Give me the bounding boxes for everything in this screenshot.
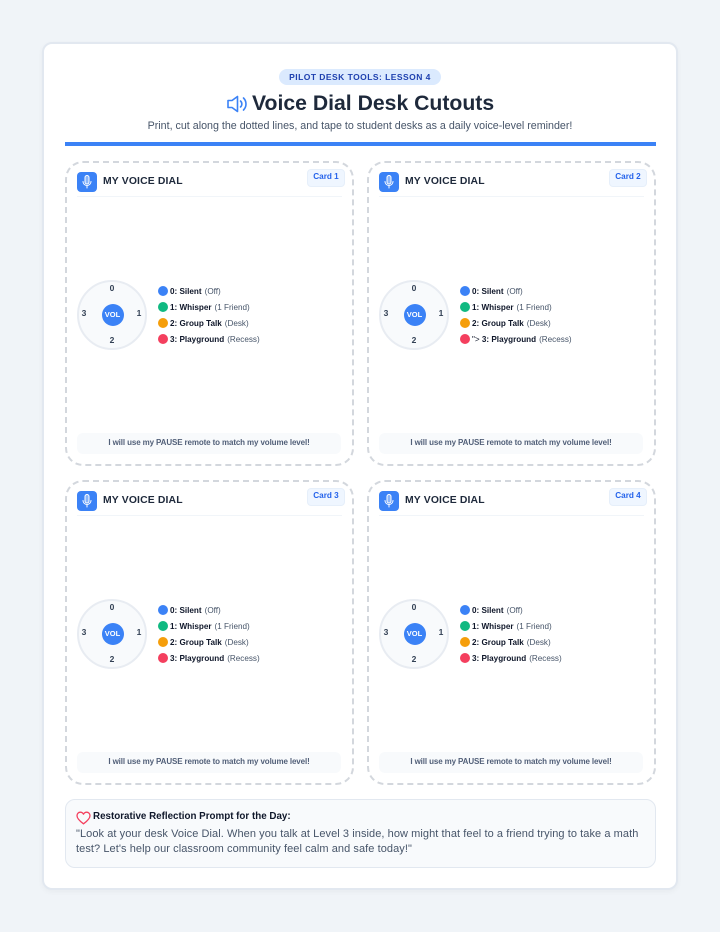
card footer: I will use my PAUSE remote to match my volume level! <box>410 756 612 766</box>
legend: 1: Whisper (1 Friend) <box>472 303 552 312</box>
card tag: Card 3 <box>313 490 339 500</box>
dial: 0 <box>110 283 114 293</box>
legend: "> 3: Playground (Recess) <box>472 335 572 344</box>
icon: speaker <box>227 96 247 112</box>
dial: 3 <box>82 627 86 637</box>
dial: 0 <box>412 602 416 612</box>
legend: 0: Silent (Off) <box>170 287 221 296</box>
prompt body <box>76 828 638 855</box>
icon: microphone <box>379 491 399 511</box>
card footer: I will use my PAUSE remote to match my volume level! <box>108 756 310 766</box>
header badge: PILOT DESK TOOLS: LESSON 4 <box>289 72 431 82</box>
panel: card 2 <box>367 161 656 466</box>
dial: 1 <box>137 627 141 637</box>
card footer: I will use my PAUSE remote to match my volume level! <box>410 438 612 446</box>
legend: 3: Playground (Recess) <box>170 654 260 663</box>
card tag <box>307 488 345 506</box>
dial <box>77 599 147 669</box>
dial: 2 <box>412 335 416 345</box>
legend: 1: Whisper (1 Friend) <box>170 303 250 312</box>
legend: 2: Group Talk (Desk) <box>170 638 249 647</box>
card heading: MY VOICE DIAL <box>405 495 485 506</box>
legend <box>460 605 562 663</box>
legend <box>460 286 572 344</box>
legend: 0: Silent (Off) <box>472 287 523 296</box>
legend: 2: Group Talk (Desk) <box>472 319 551 328</box>
card tag: Card 1 <box>313 172 339 180</box>
dial: VOL <box>407 628 422 638</box>
dial: VOL <box>105 310 120 318</box>
dial: 2 <box>412 654 416 664</box>
dial: VOL <box>407 310 422 318</box>
legend: 1: Whisper (1 Friend) <box>472 622 552 631</box>
legend <box>158 286 260 344</box>
icon: microphone <box>77 491 97 511</box>
panel: card 1 <box>65 161 354 466</box>
dial: 0 <box>412 283 416 293</box>
card tag: Card 4 <box>615 490 641 500</box>
card footer: I will use my PAUSE remote to match my volume level! <box>108 438 310 446</box>
legend: 3: Playground (Recess) <box>472 654 562 663</box>
legend: 2: Group Talk (Desk) <box>472 638 551 647</box>
dial: VOL <box>105 628 120 638</box>
dial: 1 <box>439 308 443 318</box>
card footer <box>77 752 341 772</box>
card footer <box>379 752 643 772</box>
title: Voice Dial Desk Cutouts <box>252 92 494 115</box>
panel: reflection prompt <box>65 799 656 868</box>
dial: 3 <box>82 308 86 318</box>
dial: 2 <box>110 654 114 664</box>
card tag: Card 2 <box>615 172 641 180</box>
prompt body: test? Let's help our classroom community feel calm and safe today!" <box>76 843 412 855</box>
card footer <box>379 432 643 454</box>
card footer <box>77 432 341 454</box>
dial <box>77 280 147 350</box>
card heading: MY VOICE DIAL <box>405 176 485 187</box>
prompt heading: Restorative Reflection Prompt for the Day: <box>93 811 291 822</box>
icon: heart <box>76 812 91 824</box>
subtitle: Print, cut along the dotted lines, and tape to student desks as a daily voice-level reminder! <box>148 120 572 132</box>
dial: 0 <box>110 602 114 612</box>
prompt body: "Look at your desk Voice Dial. When you talk at Level 3 inside, how might that feel to a friend trying to take a math <box>76 828 638 840</box>
card heading: MY VOICE DIAL <box>103 495 183 506</box>
dial: 1 <box>137 308 141 318</box>
card tag <box>609 488 647 506</box>
icon: microphone <box>77 172 97 192</box>
legend: 1: Whisper (1 Friend) <box>170 622 250 631</box>
legend: 0: Silent (Off) <box>170 606 221 615</box>
legend: 0: Silent (Off) <box>472 606 523 615</box>
card heading: MY VOICE DIAL <box>103 176 183 187</box>
header badge <box>279 69 441 85</box>
card tag <box>307 168 345 186</box>
panel: card 3 <box>65 480 354 784</box>
dial <box>379 280 449 350</box>
dial: 3 <box>384 308 388 318</box>
legend <box>158 605 260 663</box>
icon: microphone <box>379 172 399 192</box>
dial: 1 <box>439 627 443 637</box>
legend: 2: Group Talk (Desk) <box>170 319 249 328</box>
dial: 3 <box>384 627 388 637</box>
dial <box>379 599 449 669</box>
dial: 2 <box>110 335 114 345</box>
header rule <box>65 142 656 146</box>
panel: card 4 <box>367 480 656 784</box>
card tag <box>609 168 647 186</box>
legend: 3: Playground (Recess) <box>170 335 260 344</box>
